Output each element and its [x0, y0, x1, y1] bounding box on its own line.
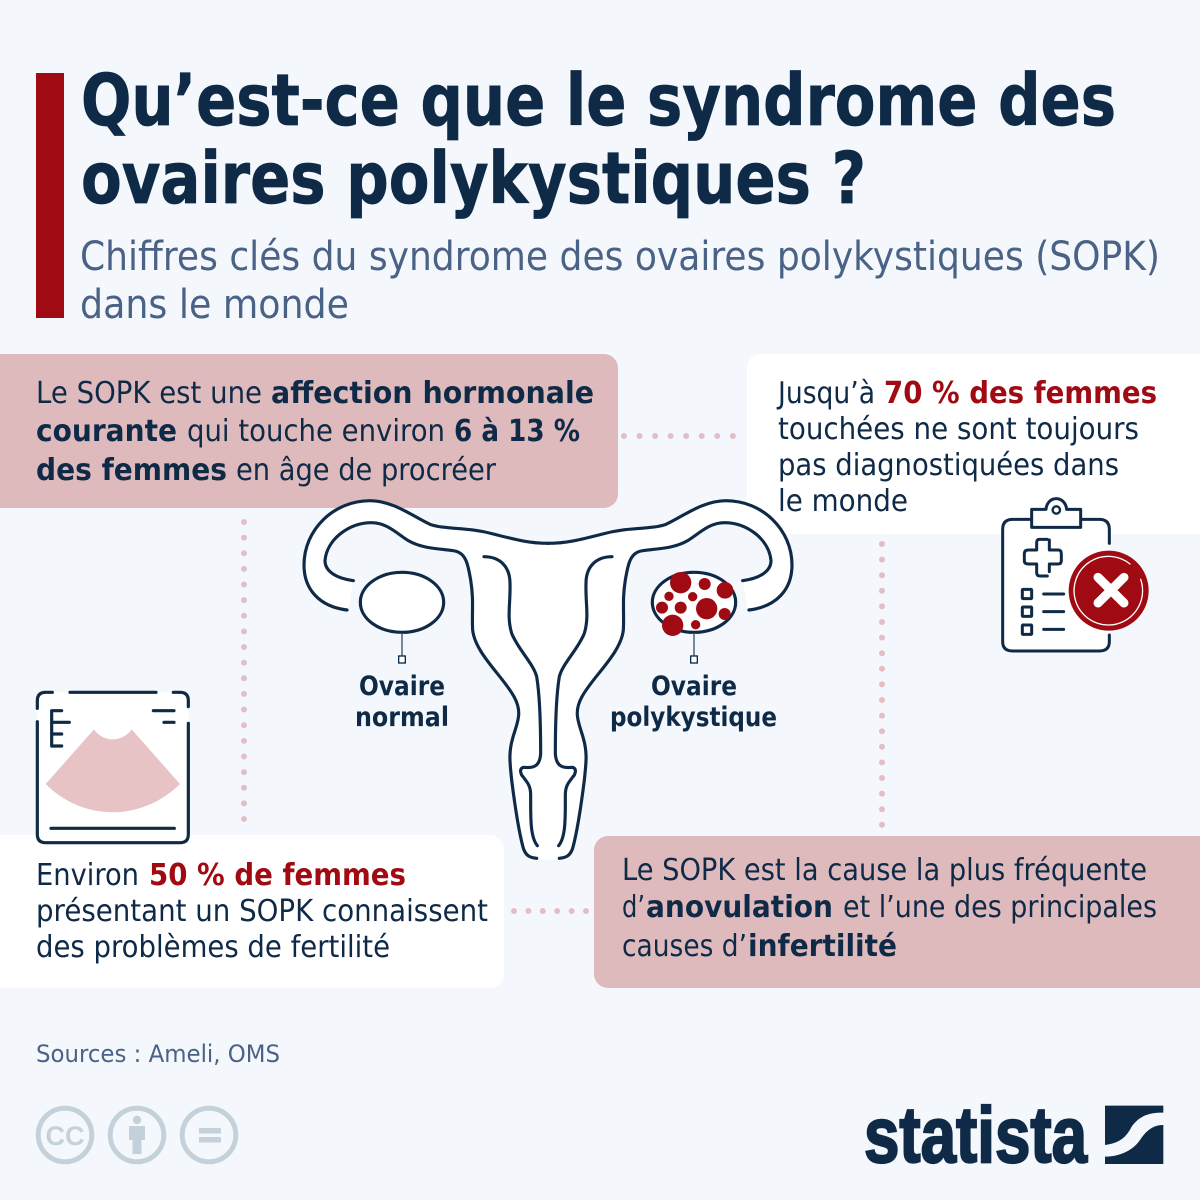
connector: left vertical dots	[241, 522, 247, 821]
title: ovaires polykystiques ?	[81, 137, 866, 220]
title	[81, 59, 1116, 220]
source note: Sources : Ameli, OMS	[36, 1040, 280, 1068]
panel: undiagnosed: pas diagnostiquées dans	[778, 448, 1119, 483]
panel: prevalence: Le SOPK est une	[36, 376, 262, 411]
connector: bottom horizontal dots	[514, 908, 587, 914]
panel: undiagnosed	[747, 354, 1200, 534]
panel: anovulation: Le SOPK est la cause la plus fréquente	[622, 853, 1147, 888]
panel: prevalence: courante	[36, 414, 177, 449]
panel: prevalence: 6 à 13 %	[454, 414, 580, 449]
panel: prevalence: en âge de procréer	[236, 453, 497, 488]
panel: fertility: présentant un SOPK connaissent	[36, 894, 488, 929]
uterus outline, right side	[548, 501, 792, 858]
panel: fertility: des problèmes de fertilité	[36, 930, 390, 965]
label: normal ovary	[355, 671, 449, 733]
panel: undiagnosed: Jusqu’à	[776, 376, 875, 411]
panel: fertility	[0, 835, 504, 988]
connector: right vertical dots	[879, 544, 885, 827]
icon: clipboard with red cross	[1003, 499, 1149, 651]
panel: anovulation: infertilité	[748, 929, 897, 964]
label: normal ovary: normal	[355, 702, 449, 733]
panel: prevalence: des femmes	[36, 453, 227, 488]
polycystic ovary	[652, 572, 736, 663]
label: polycystic ovary: Ovaire	[651, 671, 737, 702]
panel: anovulation: causes d’	[622, 929, 747, 964]
label: normal ovary: Ovaire	[359, 671, 445, 702]
panel: undiagnosed: 70 % des femmes	[884, 376, 1157, 411]
panel: fertility: 50 % de femmes	[149, 858, 406, 893]
icon: ultrasound screen	[37, 692, 188, 843]
panel: prevalence	[0, 354, 618, 508]
subtitle	[80, 234, 1160, 328]
label: polycystic ovary: polykystique	[610, 702, 777, 733]
label: polycystic ovary	[610, 671, 777, 733]
normal ovary	[360, 572, 444, 663]
panel: prevalence: qui touche environ	[187, 414, 445, 449]
panel: anovulation: anovulation	[646, 890, 833, 925]
panel: anovulation: d’	[622, 890, 645, 925]
panel: undiagnosed: touchées ne sont toujours	[778, 412, 1139, 447]
icon: creative commons licence	[38, 1108, 236, 1162]
panel: anovulation: et l’une des principales	[843, 890, 1157, 925]
accent bar	[36, 73, 64, 318]
uterus white fill, right half	[548, 501, 792, 860]
subtitle: dans le monde	[80, 282, 349, 328]
connector: top horizontal dots	[624, 433, 735, 439]
statista logo: statista	[864, 1090, 1088, 1179]
panel: prevalence: affection hormonale	[271, 376, 594, 411]
uterus white fill, left half	[304, 501, 548, 860]
panel: fertility: Environ	[36, 858, 139, 893]
uterus outline, left side	[304, 501, 548, 858]
icon: creative commons licence: CC	[46, 1121, 84, 1151]
panel: undiagnosed: le monde	[778, 484, 908, 519]
panel: anovulation	[594, 836, 1200, 988]
reproductive system illustration	[304, 501, 792, 860]
